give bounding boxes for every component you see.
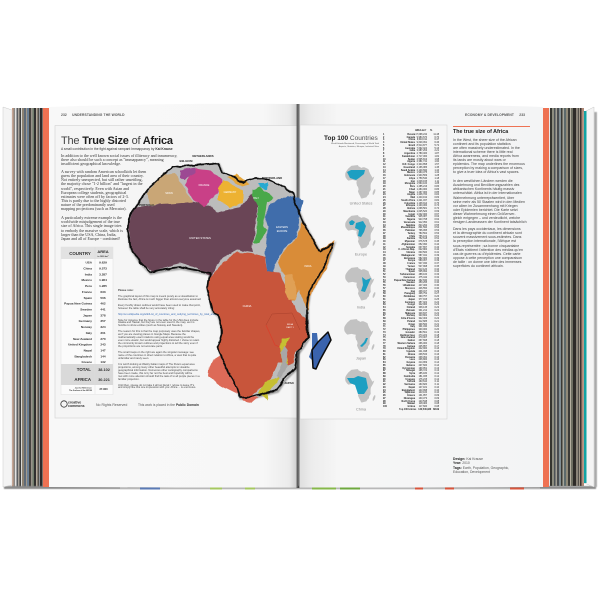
table: 301 [100,331,106,335]
left page edge stack [12,108,43,487]
table: 270 [100,337,106,341]
table: 30.221 [98,378,110,382]
table: Germany [79,319,92,323]
table: TOTAL [77,367,91,372]
table: 1.964 [99,278,107,282]
map: europe [345,215,376,248]
subtitle: A small contribution in the fight against rampant Immappancy by Kai Krause [61,146,173,150]
design credits: Design: Kai Krause Year: 2010 Tags: Earth, Population, Geographic, Education, Development [453,457,509,474]
table: 378 [100,313,106,317]
table: Bangladesh [74,354,92,358]
table: 3.287 [99,272,107,276]
map labels [350,202,372,412]
intro text: In addition to the well known social issues of illiteracy and innumeracy, there also should be such a concept as "immappancy", meaning insufficient geographical knowledge. [61,153,177,166]
table: Peru [85,284,92,288]
germany: GERMANY [224,191,237,194]
map: united states [345,165,376,198]
right teal edge [584,111,586,483]
table: 37.900 [99,387,108,391]
table: Mexico [82,278,92,282]
spain [147,173,193,205]
right column heading: The true size of Africa [453,128,508,134]
france [185,168,222,207]
notes text: Please note: The graphical layout of this map is meant purely as a visualization to illustrate the fact, Africa is much bigger than almost everyone assumes! Every freshly drawn outlines would have been used to make that point, however the table shall be very accurately citing: http://en.wikipedia.org/wiki/List_of_countries_and_outlying_territories_by_total_area Note for instance that the figure in the table for the USA does include Alaska and Hawaii, but they are not even used in the map, as it is humble to show entities (such as Norway and Sweden). The reason for this is that the map purposely uses the familiar shapes, as if you are viewing planes in Google Maps. Because the mathematically exact rotations using equal area scaling would be even more elastic, but would appear highly distorted. I chose to retain the commonly known outlines and projections to tell the story even if the proportions are not accurate parts. The small maps on the right are again the singular message: see name of the countries in direct relation to Africa, a view that is quite unfamiliar and rarely seen. It is worth looking at Wacky Italian maps of The Peters equal area projections, among many other beautiful attempts to visualize geographical information. Numerous other cartography comparisons have been made, this is by far not the best and hopefully will be met with more attention should find the task of to all purple pieces in a familiar projection. Until then, please do not take it all too literal: I refuse to leave IT's and simply like this one impression with you: Africa ... is enormous. [118,289,216,389]
table: Nepal [84,349,92,353]
example text: A particularly extreme example is the worldwide misjudgement of the true size of Africa. This single image tries to embody the massive scale, which is larger than the USA, China, India, Japan and all of Europe - combined! [61,215,123,241]
french text: Dans les pays occidentaux, les dimensions et la démographie du continent africain sont souvent massivement sous-estimées. Dans la perception internationale, l'Afrique est sous-représentée ; sa bonne cinquantaine d'États n'attirent l'attention des médias qu'en cas de guerres ou d'épidémies. Cette carte oppose à cette perception une comparaison de taille : on donne une idée des immenses superficies du continent africain. [453,227,523,268]
top 100 list [383,129,439,411]
creative commons logo: commons [68,404,85,408]
portugal: PORTUGAL [139,203,155,207]
table: Papua New Guinea [64,302,92,306]
table: 147 [100,349,106,353]
top 100 heading: Top 100 Countries [324,134,378,142]
map labels: China [356,408,367,412]
right orange fore edge [543,108,549,487]
grey gaps [276,346,289,378]
table: The Surface of the MOON [69,389,93,392]
india: INDIA [305,264,312,268]
china: PART 1 [286,326,294,329]
right page edge stack [549,108,584,486]
table [61,247,113,394]
map labels: India [357,306,366,310]
table: USA [85,260,93,264]
switzerland label: SWITZERLAND [262,176,282,180]
top 100 subheading: World Islands Mentioned, Percentage of World Total Aspects, Statistics, Ethiopia, Industrial Sites [331,143,379,148]
map labels: Japan [356,356,366,360]
table: New Zealand [73,337,92,341]
public domain statement: This work is placed in the Public Domain [138,403,199,407]
left orange fore edge [43,108,49,487]
creative commons logo: creative [68,400,81,404]
africa outline [128,163,333,397]
back cover shadow [4,112,597,489]
map: japan [344,319,375,352]
japan label: JAPAN [284,381,294,385]
left page [49,104,298,488]
map: india [345,267,376,300]
map: china [345,369,376,402]
table: in 1000 km² [98,255,109,258]
africa base [128,163,333,397]
table: 324 [100,325,106,329]
table: China [83,266,92,270]
table: 38.102 [98,368,110,372]
country names column: Russia Canada China United States Brazil Australia India Argentina Kazakhstan Sudan Algeria D.R. Congo Greenland Saudi Arabia Mexico Indonesia Libya Iran Mongolia Peru Chad Niger Angola Mali South Africa Colombia Ethiopia Bolivia Mauritania Egypt Tanzania Nigeria Venezuela Namibia Mozambique Pakistan Turkey Chile Zambia Myanmar Afghanistan Somalia C. African Rep. Ukraine Madagascar Botswana Kenya France Yemen Thailand Spain Turkmenistan Cameroon Papua New Guinea Sweden Uzbekistan Morocco Iraq Paraguay Zimbabwe Japan Germany Congo Finland Vietnam Malaysia Norway Côte d'Ivoire Poland Oman Italy Philippines Ecuador Burkina Faso New Zealand Gabon Western Sahara Guinea United Kingdom Uganda Ghana Romania Laos Guyana Belarus Kyrgyzstan Senegal Syria Cambodia Uruguay Tunisia Suriname Nepal Bangladesh Tajikistan Greece Nicaragua North Korea Malawi Eritrea [394,134,415,408]
table: 441 [100,308,106,312]
china: CHINA [243,304,251,308]
table: Spain [84,296,92,300]
left page running header: 232 UNDERSTANDING THE WORLD [61,112,125,116]
belgium [180,167,195,180]
eastern europe: EUROPE [277,230,288,233]
table: AREA [97,249,109,254]
eastern europe [265,195,303,273]
italy [252,187,273,243]
madagascar [309,332,331,369]
table: 132 [100,360,106,364]
list total: Top 100 Entries 132,546,920 88.99 [399,409,439,411]
no rights reserved: No Rights Reserved [96,403,127,407]
creative commons logo [61,400,85,408]
list header: AREA km² % [415,130,432,132]
table: 357 [100,319,106,323]
table: 1.285 [99,284,107,288]
central spine shadow [290,104,300,488]
table: 633 [100,290,106,294]
eastern europe: EASTERN [276,226,288,229]
rank column: 1 2 3 4 5 6 7 8 9 10 11 12 13 14 15 16 17 18 19 20 21 22 23 24 25 26 27 28 29 30 31 32 33 34 35 36 37 38 39 40 41 42 43 44 45 46 47 48 49 50 51 52 53 54 55 56 57 58 59 60 61 62 63 64 65 66 67 68 69 70 71 72 73 74 75 76 77 78 79 80 81 82 83 84 85 86 87 88 89 90 91 92 93 94 95 96 97 98 99 100 [383,134,387,408]
mexico [208,355,259,403]
map labels: Europe [355,252,367,256]
switzerland [258,183,268,190]
india [278,222,335,312]
table: Greece [82,360,92,364]
spain: SPAIN [165,191,173,195]
united states: UNITED STATES [189,236,211,240]
map labels: United States [350,202,372,206]
india part 2 [285,274,297,300]
belgium label: BELGIUM [180,159,193,163]
map shadow [129,164,334,398]
table: United Kingdom [68,343,92,347]
table: 144 [100,354,106,358]
france: FRANCE [199,183,210,187]
panel: left infographic page [55,126,297,418]
back cover [3,107,594,487]
table: 9.629 [99,260,107,264]
panel: right infographic page [300,125,447,419]
germany [218,174,250,208]
china: INDIA [287,323,293,326]
table: 506 [100,296,106,300]
english text: In the West, the sheer size of the African continent and its population statistics are often massively underestimated. In the international scheme there is little real Africa awareness, and media reports from its lands are mostly about wars or epidemics. The map underlines the enormous perception by making a comparison of sizes, to give a truer idea of Africa's vast spaces. [453,138,525,174]
china [207,252,308,398]
percent column: 11.48 6.70 6.47 6.46 5.72 5.16 2.21 1.87 1.82 1.68 1.60 1.57 1.45 1.44 1.32 1.28 1.18 1.11 1.05 0.86 0.86 0.85 0.84 0.83 0.82 0.76 0.74 0.74 0.69 0.67 0.63 0.62 0.61 0.55 0.54 0.53 0.53 0.51 0.51 0.45 0.44 0.43 0.42 0.41 0.39 0.39 0.39 0.37 0.35 0.34 0.34 0.33 0.32 0.31 0.30 0.30 0.30 0.29 0.27 0.26 0.25 0.24 0.23 0.23 0.22 0.22 0.22 0.22 0.21 0.21 0.20 0.20 0.19 0.18 0.18 0.18 0.18 0.17 0.16 0.16 0.16 0.16 0.16 0.14 0.14 0.13 0.13 0.12 0.12 0.12 0.11 0.11 0.10 0.10 0.10 0.09 0.09 0.08 0.08 0.08 [433,134,439,408]
table: Norway [81,325,92,329]
table: France [82,290,92,294]
table: India [85,272,92,276]
right column rule [453,126,530,127]
area column: 17,098,242 9,984,670 9,640,011 9,629,091 8,514,877 7,692,024 3,287,263 2,780,400 2,717,300 2,505,813 2,381,741 2,344,858 2,166,086 2,149,690 1,964,375 1,904,569 1,759,540 1,648,195 1,564,100 1,285,216 1,284,000 1,267,000 1,246,700 1,240,192 1,221,037 1,138,914 1,104,300 1,098,581 1,025,520 1,002,000 945,087 923,768 912,050 824,292 801,590 796,095 783,562 756,102 752,618 676,578 652,090 637,657 622,984 603,500 587,041 582,000 580,367 547,030 527,968 513,120 505,992 488,100 475,442 462,840 450,295 447,400 446,550 438,317 406,752 390,757 377,915 357,022 342,000 338,145 331,212 329,847 323,802 322,463 312,685 309,500 301,340 300,000 283,561 274,222 270,467 267,668 266,000 245,857 242,900 241,038 238,533 238,391 236,800 214,969 207,600 199,951 196,722 185,180 181,035 176,215 163,610 163,820 147,181 143,998 143,100 131,957 130,373 120,538 118,484 117,600 [415,134,427,408]
table: 462 [100,302,106,306]
survey text: A survey with random American schoolkids let them guess the population and land area of their country. Not entirely unexpected, but still rather unsettling, the majority chose "1-2 billion" and "largest in the world", respectively. Even with Asian and European college students, geographical estimates were often off by factors of 2-3. This is partly due to the highly distorted nature of the predominantly used mapping projections (such as Mercator). [61,169,146,211]
german text: In den westlichen Ländern werden die Ausdehnung und Bevölkerungszahlen des afrikanischen Kontinents häufig massiv unterschätzt. Afrika ist in der internationalen Wahrnehmung unterrepräsentiert, über seine mehr als 50 Staaten wird in den Medien vor allem im Zusammenhang mit Kriegen oder Epidemien berichtet. Die Karte setzt dieser Wahrnehmung einen Größenver- gleich entgegen – und verdeutlicht, welche riesigen Landmassen der Kontinent tatsächlich [453,179,527,224]
table: Italy [86,331,92,335]
table: Sweden [80,308,92,312]
table: Japan [83,313,92,317]
table: AFRICA [74,377,92,382]
united states [129,193,258,277]
table: 9.573 [99,266,107,270]
netherlands label: NETHERLANDS [192,154,214,158]
italy: ITALY [253,197,260,200]
right page [299,104,543,488]
page edge colour bits [120,488,540,490]
japan [258,338,290,400]
right page running header: ECONOMY & DEVELOPMENT 233 [465,112,525,116]
table: Just for Reference: [75,386,92,390]
table: COUNTRY [69,251,91,256]
title: The True Size of Africa [61,134,173,146]
table: 243 [100,343,106,347]
